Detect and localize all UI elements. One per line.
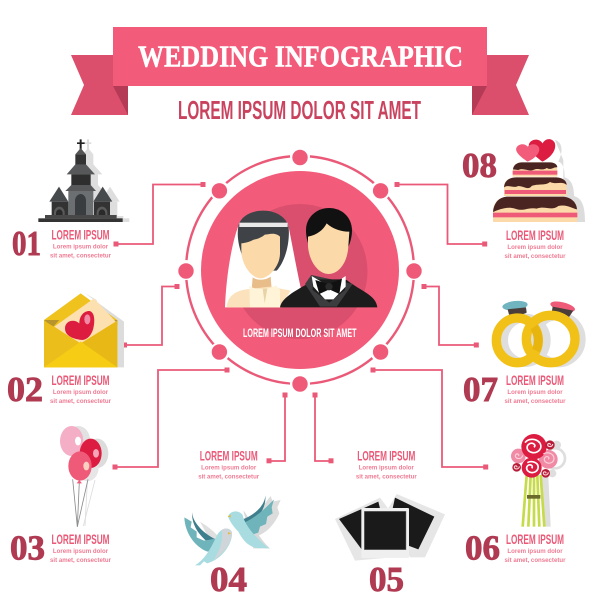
subtitle: LOREM IPSUM DOLOR SIT AMET (178, 95, 421, 125)
icon: bride and groom (225, 208, 377, 307)
label 08 (505, 228, 566, 260)
label 02: sit amet, consectetur (50, 398, 112, 405)
label 01: LOREM IPSUM (52, 228, 110, 242)
number 01: 01 (12, 224, 41, 263)
number 03: 03 (10, 528, 45, 568)
label 05: LOREM IPSUM (357, 449, 415, 464)
item 03 (10, 426, 112, 568)
label 06: Lorem ipsum dolor (507, 548, 563, 555)
icon: bouquet (511, 434, 565, 527)
item 05 (335, 449, 445, 599)
number 07: 07 (463, 370, 498, 409)
icon: rings (496, 299, 581, 363)
icon: church (38, 139, 129, 222)
connector lines (112, 182, 488, 470)
number 08: 08 (462, 146, 497, 185)
label 01 (50, 228, 112, 260)
label 02 (50, 373, 112, 405)
icon: love letter (44, 293, 124, 367)
number 02: 02 (7, 370, 43, 409)
central ring with nodes (176, 146, 424, 394)
central disc (201, 171, 399, 369)
icon: cake (493, 139, 585, 222)
item 07 (463, 299, 581, 409)
label 03: Lorem ipsum dolor (53, 548, 109, 555)
label 07: LOREM IPSUM (506, 373, 564, 388)
item 04 (184, 449, 281, 599)
number 05: 05 (369, 560, 404, 599)
label 04: sit amet, consectetur (198, 474, 260, 481)
label 01: sit amet, consectetur (50, 252, 112, 260)
label 08: Lorem ipsum dolor (507, 244, 563, 251)
label 01: Lorem ipsum dolor (53, 244, 109, 250)
label 04 (198, 449, 260, 481)
label 07: sit amet, consectetur (505, 398, 566, 405)
label 03: LOREM IPSUM (52, 532, 110, 547)
number 06: 06 (465, 528, 500, 568)
label 07 (505, 373, 566, 405)
label 05: Lorem ipsum dolor (359, 465, 415, 472)
item 06 (465, 434, 566, 568)
label 02: Lorem ipsum dolor (53, 389, 109, 396)
label 02: LOREM IPSUM (52, 373, 110, 388)
label 08: sit amet, consectetur (505, 253, 566, 260)
disc caption: LOREM IPSUM DOLOR SIT AMET (243, 326, 357, 340)
label 07: Lorem ipsum dolor (507, 389, 563, 396)
number 04: 04 (210, 560, 247, 599)
label 06: LOREM IPSUM (506, 532, 564, 547)
item 08 (462, 139, 585, 260)
title: WEDDING INFOGRAPHIC (138, 38, 463, 74)
label 04: Lorem ipsum dolor (201, 465, 257, 472)
banner (71, 27, 529, 115)
label 05 (356, 449, 417, 481)
label 06 (505, 532, 566, 564)
icon: doves (184, 495, 281, 565)
icon: photos (335, 494, 445, 561)
label 08: LOREM IPSUM (506, 228, 564, 243)
label 04: LOREM IPSUM (200, 449, 258, 464)
label 05: sit amet, consectetur (356, 474, 417, 481)
item 02 (7, 293, 124, 409)
label 03: sit amet, consectetur (50, 557, 112, 564)
label 06: sit amet, consectetur (505, 557, 566, 564)
icon: balloons (60, 426, 108, 527)
label 03 (50, 532, 112, 564)
item 01 (12, 139, 129, 263)
